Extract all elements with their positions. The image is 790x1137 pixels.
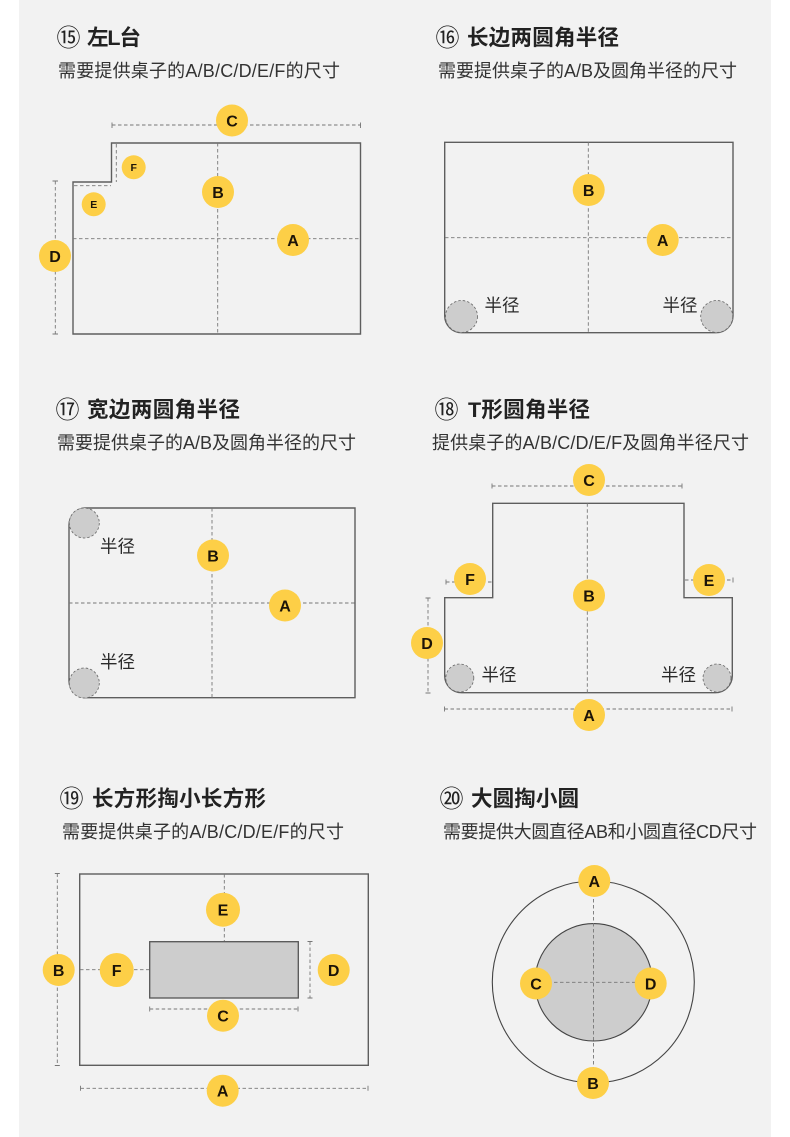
- heading: 20: [440, 779, 579, 814]
- badge C: [520, 968, 552, 1000]
- label: right radius: 半径: [662, 296, 698, 316]
- icon: left corner radius: [446, 664, 474, 692]
- panel: 18 T shape round corners: [411, 390, 749, 731]
- badge C: C: [217, 1009, 229, 1026]
- icon: right corner radius: [703, 664, 731, 692]
- diagram: inner cutout: [150, 942, 298, 998]
- badge D: [318, 954, 350, 986]
- text: description 16: 需要提供桌子的A/B及圆角半径的尺寸: [438, 61, 737, 81]
- badge A: A: [279, 598, 291, 616]
- heading: 20: 大圆掏小圆: [471, 787, 579, 811]
- badge A: [207, 1075, 239, 1107]
- badge B: B: [207, 548, 219, 566]
- badge F: [100, 953, 134, 987]
- panel: 15 left L table: [39, 18, 361, 334]
- text: description 20: 需要提供大圆直径AB和小圆直径CD尺寸: [443, 822, 757, 842]
- diagram: outer rectangle: [80, 874, 368, 1065]
- badge D: [411, 627, 443, 659]
- dimension lines 20: [536, 881, 651, 1083]
- badge A: A: [287, 233, 299, 250]
- label: left radius: 半径: [482, 665, 516, 685]
- badge A: A: [657, 233, 669, 250]
- panel: 17 wide edge two round corners: [56, 390, 356, 698]
- heading: 17: [56, 390, 240, 425]
- badge B: B: [212, 185, 224, 202]
- label: top radius: 半径: [100, 536, 135, 556]
- badge C: [216, 104, 248, 136]
- badge E: [693, 564, 725, 596]
- dimension ticks 15: [52, 122, 360, 334]
- badge F: [122, 155, 146, 179]
- heading: 15: 左L台: [87, 25, 141, 50]
- badge B: B: [587, 1076, 599, 1093]
- badge E: E: [90, 199, 97, 211]
- dimension ticks 19: [55, 874, 368, 1091]
- badge A: [573, 699, 605, 731]
- diagram: inner circle: [535, 924, 652, 1041]
- badge B: [43, 954, 75, 986]
- badge F: [454, 563, 486, 595]
- badge B: B: [583, 183, 594, 200]
- panel: 20 big circle with small circle cutout: [440, 779, 757, 1099]
- diagram: L table outline: [73, 143, 360, 334]
- heading: 20: ⑳: [440, 779, 464, 814]
- dimension ticks 18: [426, 484, 733, 712]
- badge D: D: [49, 249, 61, 266]
- heading: 17: 宽边两圆角半径: [87, 397, 240, 422]
- badge B: B: [583, 588, 595, 606]
- heading: 16: 长边两圆角半径: [467, 26, 619, 50]
- badge A: [578, 865, 610, 897]
- badge B: [202, 176, 234, 208]
- badge B: B: [53, 963, 64, 980]
- heading: 16: ⑯: [436, 18, 460, 53]
- badge F: F: [130, 162, 137, 174]
- badge C: C: [583, 473, 595, 490]
- dimension lines 18: [428, 486, 733, 709]
- badge B: [577, 1067, 609, 1099]
- heading: 15: ⑮: [56, 18, 80, 53]
- badge B: [573, 174, 605, 206]
- heading: 17: ⑰: [56, 390, 80, 425]
- badge D: D: [328, 963, 339, 980]
- diagram: table outline 17: [69, 508, 355, 698]
- badge D: D: [421, 636, 433, 653]
- label: bottom radius: 半径: [100, 652, 135, 672]
- panel: 16 long edge two round corners: [436, 18, 737, 333]
- label: left radius: 半径: [484, 296, 520, 316]
- badge A: A: [589, 874, 601, 891]
- dimension lines 16: [445, 142, 733, 333]
- badge D: D: [645, 976, 656, 994]
- heading: 19: [60, 779, 266, 814]
- text: description 17: 需要提供桌子的A/B及圆角半径的尺寸: [57, 433, 356, 453]
- badge F: F: [112, 963, 122, 980]
- badge A: [269, 590, 301, 622]
- text: description 18: 提供桌子的A/B/C/D/E/F及圆角半径尺寸: [432, 433, 749, 453]
- badge E: E: [704, 573, 715, 590]
- badge E: [206, 893, 240, 927]
- heading: 18: ⑱: [434, 390, 458, 425]
- badge B: [197, 540, 229, 572]
- badge A: [647, 224, 679, 256]
- icon: right corner radius: [701, 300, 733, 332]
- badge B: [573, 580, 605, 612]
- heading: 18: T形圆角半径: [468, 398, 590, 422]
- badge A: A: [217, 1084, 229, 1101]
- badge C: [207, 1000, 239, 1032]
- icon: top corner radius: [69, 508, 99, 538]
- badge C: C: [226, 114, 238, 130]
- label: right radius: 半径: [661, 665, 696, 685]
- diagram: table outline 16: [445, 142, 733, 333]
- text: description 19: 需要提供桌子的A/B/C/D/E/F的尺寸: [62, 822, 344, 842]
- heading: 16: [436, 18, 619, 53]
- text: description 15: 需要提供桌子的A/B/C/D/E/F的尺寸: [58, 61, 340, 81]
- badge D: [39, 240, 71, 272]
- heading: 19: ⑲: [60, 779, 84, 814]
- diagram: outer circle: [492, 881, 694, 1083]
- icon: left corner radius: [446, 300, 478, 332]
- panel: 19 rectangle with rectangular cutout: [43, 779, 368, 1107]
- diagram: T table outline: [445, 503, 732, 693]
- icon: bottom corner radius: [69, 668, 99, 698]
- badge A: [277, 224, 309, 256]
- badge C: [573, 464, 605, 496]
- dimension lines 19: [57, 874, 368, 1088]
- badge E: E: [218, 903, 229, 920]
- badge D: [635, 968, 667, 1000]
- dimension lines 15: [55, 125, 361, 334]
- heading: 15: [56, 18, 141, 53]
- heading: 19: 长方形掏小长方形: [92, 786, 266, 811]
- badge C: C: [530, 976, 542, 994]
- badge F: F: [465, 572, 475, 589]
- heading: 18: [434, 390, 590, 425]
- dimension lines 17: [69, 508, 355, 698]
- badge E: [82, 192, 106, 216]
- badge A: A: [583, 708, 595, 725]
